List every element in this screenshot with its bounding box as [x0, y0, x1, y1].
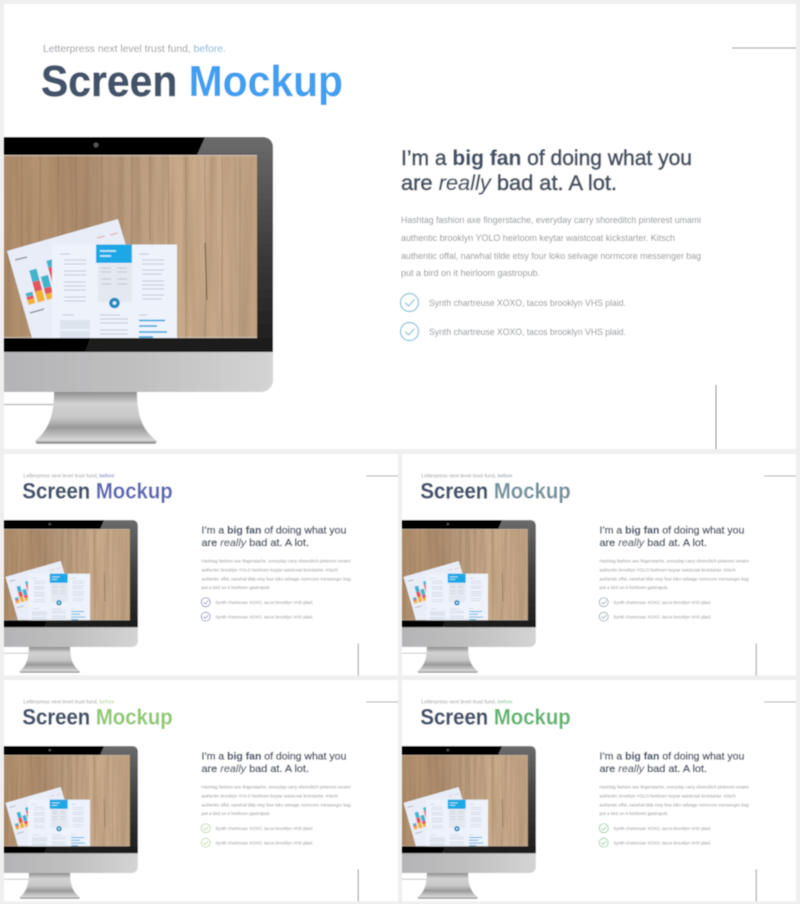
divider line behind monitor	[4, 652, 29, 654]
check item 2: Synth chartreuse XOXO, tacos brooklyn VHS plaid.	[215, 614, 313, 619]
slide: green variant	[402, 680, 796, 901]
body paragraph: put a bird on it heirloom gastropub.	[202, 585, 271, 590]
check item 1: Synth chartreuse XOXO, tacos brooklyn VHS plaid.	[613, 600, 711, 605]
divider line behind monitor	[4, 404, 54, 406]
panel background	[402, 680, 796, 901]
divider line behind monitor	[402, 878, 427, 880]
heading: I’m a big fan of doing what you	[401, 147, 692, 170]
bottom-right rule	[755, 870, 757, 901]
body paragraph: authentic brooklyn YOLO heirloom keytar waistcoat kickstarter. Kitsch	[401, 233, 675, 243]
check item 1: Synth chartreuse XOXO, tacos brooklyn VHS plaid.	[429, 298, 626, 308]
body paragraph	[600, 784, 749, 816]
monitor mockup	[402, 520, 536, 673]
check item 2: Synth chartreuse XOXO, tacos brooklyn VHS plaid.	[215, 840, 313, 845]
check item 1	[201, 598, 313, 607]
monitor mockup	[4, 520, 138, 673]
heading: I’m a big fan of doing what you	[202, 525, 346, 536]
slide: large blue variant	[4, 4, 796, 449]
heading	[600, 525, 744, 549]
top-right rule	[366, 701, 398, 703]
check item 1	[599, 824, 711, 833]
heading	[600, 751, 744, 775]
top-right rule	[366, 475, 398, 477]
body paragraph: Hashtag fashion axe fingerstache, everyday carry shoreditch pinterest umami	[401, 215, 701, 225]
heading: are really bad at. A lot.	[401, 172, 617, 195]
check item 1	[599, 598, 711, 607]
panel background	[4, 454, 398, 675]
body paragraph: Hashtag fashion axe fingerstache, everyday carry shoreditch pinterest umami	[600, 558, 749, 563]
monitor mockup	[402, 746, 536, 899]
body paragraph: authentic brooklyn YOLO heirloom keytar waistcoat kickstarter. Kitsch	[600, 793, 736, 798]
monitor mockup	[4, 746, 138, 899]
slide: slate variant	[402, 454, 796, 675]
divider line behind monitor	[402, 652, 427, 654]
check item 1	[400, 294, 626, 312]
heading	[202, 525, 346, 549]
heading: are really bad at. A lot.	[600, 538, 707, 549]
body paragraph: authentic offal, narwhal tilde etsy four loko selvage normcore messenger bag	[600, 576, 749, 581]
heading: I’m a big fan of doing what you	[202, 751, 346, 762]
body paragraph: authentic offal, narwhal tilde etsy four loko selvage normcore messenger bag	[202, 576, 351, 581]
body paragraph	[401, 215, 701, 278]
check item 1: Synth chartreuse XOXO, tacos brooklyn VHS plaid.	[215, 826, 313, 831]
title: Screen Mockup	[41, 57, 343, 106]
body paragraph	[600, 558, 749, 590]
check item 1	[201, 824, 313, 833]
body paragraph: Hashtag fashion axe fingerstache, everyday carry shoreditch pinterest umami	[202, 558, 351, 563]
check item 1: Synth chartreuse XOXO, tacos brooklyn VHS plaid.	[215, 600, 313, 605]
body paragraph: authentic brooklyn YOLO heirloom keytar waistcoat kickstarter. Kitsch	[202, 567, 338, 572]
kicker text: Letterpress next level trust fund, before.	[43, 43, 226, 55]
check item 2	[400, 322, 626, 340]
check item 2	[201, 838, 313, 847]
title: Screen Mockup	[420, 479, 571, 504]
heading: I’m a big fan of doing what you	[600, 525, 744, 536]
kicker text: Letterpress next level trust fund, before	[421, 699, 513, 705]
bottom-right rule	[357, 644, 359, 675]
body paragraph: put a bird on it heirloom gastropub.	[401, 268, 540, 278]
check item 2: Synth chartreuse XOXO, tacos brooklyn VHS plaid.	[613, 840, 711, 845]
check item 2	[201, 612, 313, 621]
divider line behind monitor	[4, 878, 29, 880]
body paragraph: authentic brooklyn YOLO heirloom keytar waistcoat kickstarter. Kitsch	[600, 567, 736, 572]
body paragraph: authentic brooklyn YOLO heirloom keytar waistcoat kickstarter. Kitsch	[202, 793, 338, 798]
body paragraph	[202, 558, 351, 590]
bottom-right rule	[357, 870, 359, 901]
title: Screen Mockup	[22, 479, 173, 504]
slide: purple variant	[4, 454, 398, 675]
title: Screen Mockup	[420, 705, 571, 730]
check item 2	[599, 612, 711, 621]
check item 2: Synth chartreuse XOXO, tacos brooklyn VHS plaid.	[613, 614, 711, 619]
kicker text: Letterpress next level trust fund, before	[421, 473, 513, 479]
check item 1: Synth chartreuse XOXO, tacos brooklyn VHS plaid.	[613, 826, 711, 831]
body paragraph: put a bird on it heirloom gastropub.	[600, 585, 669, 590]
monitor mockup	[4, 137, 273, 444]
body paragraph: Hashtag fashion axe fingerstache, everyday carry shoreditch pinterest umami	[600, 784, 749, 789]
heading: are really bad at. A lot.	[202, 764, 309, 775]
top-right rule	[732, 47, 796, 49]
heading: are really bad at. A lot.	[600, 764, 707, 775]
slide: light green variant	[4, 680, 398, 901]
bottom-right rule	[715, 385, 717, 449]
body paragraph: put a bird on it heirloom gastropub.	[600, 811, 669, 816]
check item 2: Synth chartreuse XOXO, tacos brooklyn VHS plaid.	[429, 327, 626, 337]
top-right rule	[764, 701, 796, 703]
panel background	[402, 454, 796, 675]
title: Screen Mockup	[22, 705, 173, 730]
check item 2	[599, 838, 711, 847]
body paragraph	[202, 784, 351, 816]
kicker text: Letterpress next level trust fund, before	[23, 473, 115, 479]
body paragraph: authentic offal, narwhal tilde etsy four loko selvage normcore messenger bag	[600, 802, 749, 807]
heading: I’m a big fan of doing what you	[600, 751, 744, 762]
top-right rule	[764, 475, 796, 477]
kicker text: Letterpress next level trust fund, before	[23, 699, 115, 705]
heading	[202, 751, 346, 775]
body paragraph: Hashtag fashion axe fingerstache, everyday carry shoreditch pinterest umami	[202, 784, 351, 789]
bottom-right rule	[755, 644, 757, 675]
heading	[401, 147, 692, 195]
panel background	[4, 680, 398, 901]
panel background	[4, 4, 796, 449]
body paragraph: authentic offal, narwhal tilde etsy four loko selvage normcore messenger bag	[202, 802, 351, 807]
body paragraph: authentic offal, narwhal tilde etsy four loko selvage normcore messenger bag	[401, 251, 701, 261]
body paragraph: put a bird on it heirloom gastropub.	[202, 811, 271, 816]
heading: are really bad at. A lot.	[202, 538, 309, 549]
